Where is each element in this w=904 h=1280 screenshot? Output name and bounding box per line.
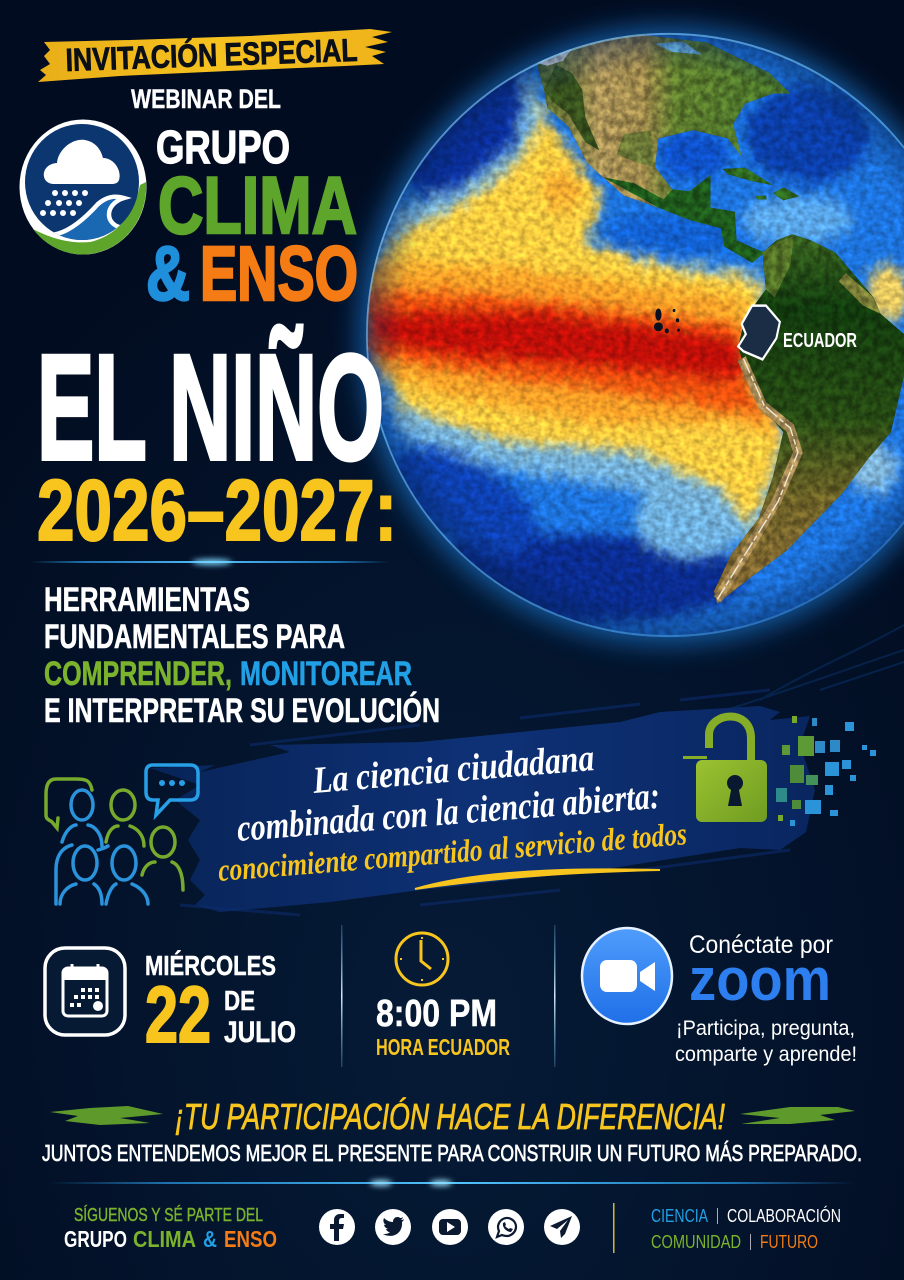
icon: WhatsApp <box>488 1209 524 1245</box>
land: Caribbean islands <box>723 168 799 200</box>
land: Ecuador highlighted <box>738 306 780 359</box>
panel: time: HORA ECUADOR <box>376 1034 510 1060</box>
footer: follow us: ENSO <box>224 1226 277 1252</box>
footer: values: COMUNIDAD <box>651 1232 741 1252</box>
icon: community of people with speech bubbles <box>46 765 198 904</box>
footer: values <box>651 1205 841 1252</box>
globe: El Niño sea surface temperature map <box>360 20 904 673</box>
text: script slogan: combinada con la ciencia abierta: <box>235 775 661 850</box>
heading: Grupo Clima & ENSO: CLIMA <box>158 161 357 251</box>
subtitle text block: HERRAMIENTAS <box>44 581 250 619</box>
heading: Grupo Clima & ENSO: ENSO <box>200 231 358 317</box>
land with terrain texture <box>537 34 904 603</box>
subtitle text block <box>44 581 440 730</box>
footer: values: COLABORACIÓN <box>727 1205 841 1226</box>
logo: Grupo Clima & ENSO emblem <box>20 120 146 260</box>
subtitle text block: FUNDAMENTALES PARA <box>44 618 345 656</box>
panel: date: 22 <box>145 970 211 1059</box>
text: script slogan <box>217 737 688 888</box>
footer: follow us: CLIMA <box>133 1226 196 1252</box>
icon: Zoom camera <box>582 928 672 1024</box>
panel: date <box>45 948 296 1059</box>
heading: Grupo Clima & ENSO: & <box>146 231 190 317</box>
text: script slogan: La ciencia ciudadana <box>310 737 596 802</box>
heading: Grupo Clima & ENSO: GRUPO <box>156 121 290 173</box>
underline stroke <box>415 869 660 889</box>
subtitle text block: COMPRENDER, <box>44 655 232 693</box>
panel: Zoom connection: zoom <box>689 946 831 1013</box>
icon: YouTube <box>432 1209 468 1245</box>
icon: calendar <box>45 948 125 1035</box>
panel: date: DE <box>224 985 255 1016</box>
icon: Facebook <box>319 1209 355 1245</box>
brush banner: Invitación especial: INVITACIÓN ESPECIAL <box>65 32 358 78</box>
text: script slogan: conocimiente compartido al servicio de todos <box>217 815 688 888</box>
glow divider <box>48 1180 855 1186</box>
land: North America <box>537 34 790 263</box>
brush stroke: right green <box>740 1107 855 1124</box>
label: Ecuador: ECUADOR <box>783 330 857 352</box>
title: El Niño: EL NIÑO <box>37 323 384 491</box>
footer: follow us: & <box>203 1226 217 1252</box>
footer: follow us <box>64 1205 277 1252</box>
panel: citizen and open science brush banner <box>150 690 815 915</box>
icon: Telegram <box>544 1209 580 1245</box>
icon: clock <box>396 933 448 985</box>
subtitle text block: MONITOREAR <box>240 655 412 693</box>
footer: values: FUTURO <box>760 1232 818 1252</box>
glow divider <box>30 559 390 565</box>
subtitle text block: E INTERPRETAR SU EVOLUCIÓN <box>44 692 440 730</box>
callout: tu participación hace la diferencia: ¡TU PARTICIPACIÓN HACE LA DIFERENCIA! <box>175 1096 725 1137</box>
icon: open padlock <box>683 716 767 822</box>
brush stroke: left green <box>50 1106 163 1125</box>
footer: values: CIENCIA <box>651 1206 708 1226</box>
panel: time <box>376 933 510 1060</box>
land: South America <box>714 234 904 603</box>
footer: follow us: GRUPO <box>64 1226 127 1252</box>
icon: dissolving data pixels <box>776 716 876 826</box>
footer: follow us: SÍGUENOS Y SÉ PARTE DEL <box>74 1205 263 1225</box>
land: Galápagos islands <box>654 308 680 333</box>
panel: Zoom connection: comparte y aprende! <box>675 1043 857 1066</box>
panel: time: 8:00 PM <box>376 993 497 1035</box>
panel: date: MIÉRCOLES <box>145 950 276 981</box>
text: Webinar del: WEBINAR DEL <box>131 84 281 114</box>
panel: Zoom connection: ¡Participa, pregunta, <box>676 1017 855 1040</box>
panel: Zoom connection: Conéctate por <box>689 931 833 959</box>
panel: Zoom connection <box>582 928 857 1066</box>
heading: Grupo Clima & ENSO <box>146 121 358 317</box>
panel: date: JULIO <box>224 1016 296 1049</box>
title: years 2026–2027: 2026–2027: <box>37 463 397 559</box>
icon: Twitter <box>375 1209 411 1245</box>
